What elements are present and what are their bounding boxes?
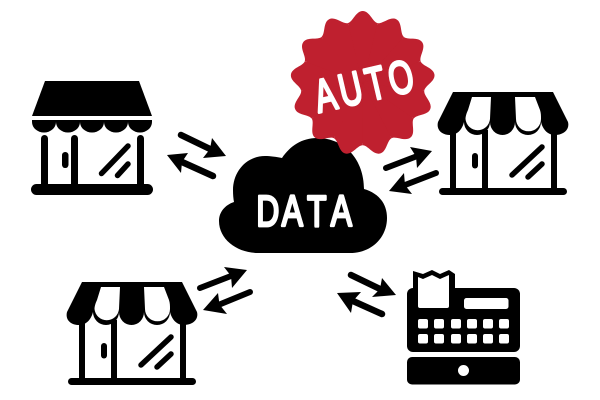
red starburst [289, 11, 436, 157]
arrow to cloud [337, 292, 382, 314]
awning scallops [32, 120, 152, 132]
cash register [407, 270, 520, 384]
door handle [472, 153, 478, 168]
store base [68, 378, 196, 385]
striped awning [67, 282, 197, 325]
auto badge [289, 11, 436, 157]
arrows: bottom left store and cloud [200, 267, 250, 314]
badge label: AUTO [309, 50, 419, 123]
store: top left with plain awning [31, 81, 153, 195]
arrow to register [351, 275, 396, 297]
window glare [512, 147, 542, 177]
striped awning [438, 92, 568, 135]
arrow to store [386, 147, 432, 168]
data cloud [219, 138, 387, 253]
arrow to cloud [389, 173, 436, 194]
arrows: cash register and cloud [337, 275, 396, 314]
store columns [41, 135, 144, 190]
store columns [79, 320, 186, 380]
store: top right with striped awning [438, 92, 568, 195]
window glare [141, 337, 171, 367]
arrow to cloud [181, 135, 226, 158]
store base [439, 188, 567, 195]
keypad [418, 319, 509, 344]
store: bottom left with striped awning [67, 282, 197, 385]
display [464, 298, 508, 309]
arrows: top left store and cloud [167, 135, 226, 176]
door handle [62, 152, 68, 168]
window glare [102, 146, 128, 176]
register body [407, 288, 520, 352]
drawer button [458, 365, 469, 376]
cloud label: DATA [256, 187, 352, 236]
cash drawer [407, 357, 520, 384]
store base [31, 184, 153, 195]
arrow to store [167, 153, 213, 176]
receipt [413, 270, 455, 308]
store columns [450, 130, 557, 190]
cloud shape [219, 138, 387, 253]
door handle [101, 343, 107, 358]
arrow to store [203, 292, 250, 314]
arrows: top right store and cloud [386, 147, 436, 194]
awning roof [32, 81, 152, 116]
arrow to cloud [200, 267, 247, 288]
